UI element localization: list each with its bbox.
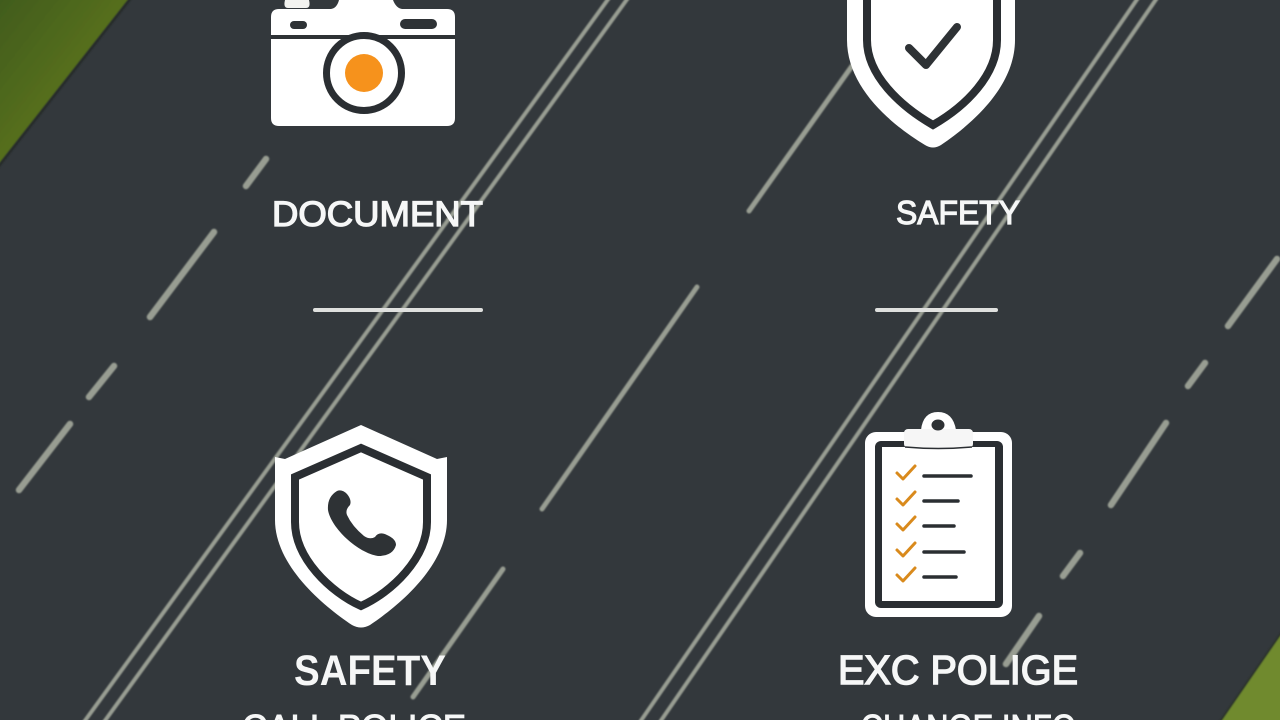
heading: document: DOCUMENT: [272, 195, 483, 234]
heading: safety top: SAFETY: [896, 194, 1020, 231]
icon: clipboard checklist: [865, 412, 1012, 617]
divider: left: [315, 308, 481, 312]
icon: safety shield with check: [847, 0, 1015, 148]
icon: safety shield with phone: [275, 425, 447, 628]
heading: exc police: EXC POLIGE: [838, 647, 1078, 693]
heading: safety bottom: SAFETY: [294, 647, 446, 695]
divider: right: [877, 308, 996, 312]
icon: camera: [271, 0, 455, 126]
grass corner: bottom right: [1217, 626, 1280, 720]
grass corner: top left: [0, 0, 134, 172]
